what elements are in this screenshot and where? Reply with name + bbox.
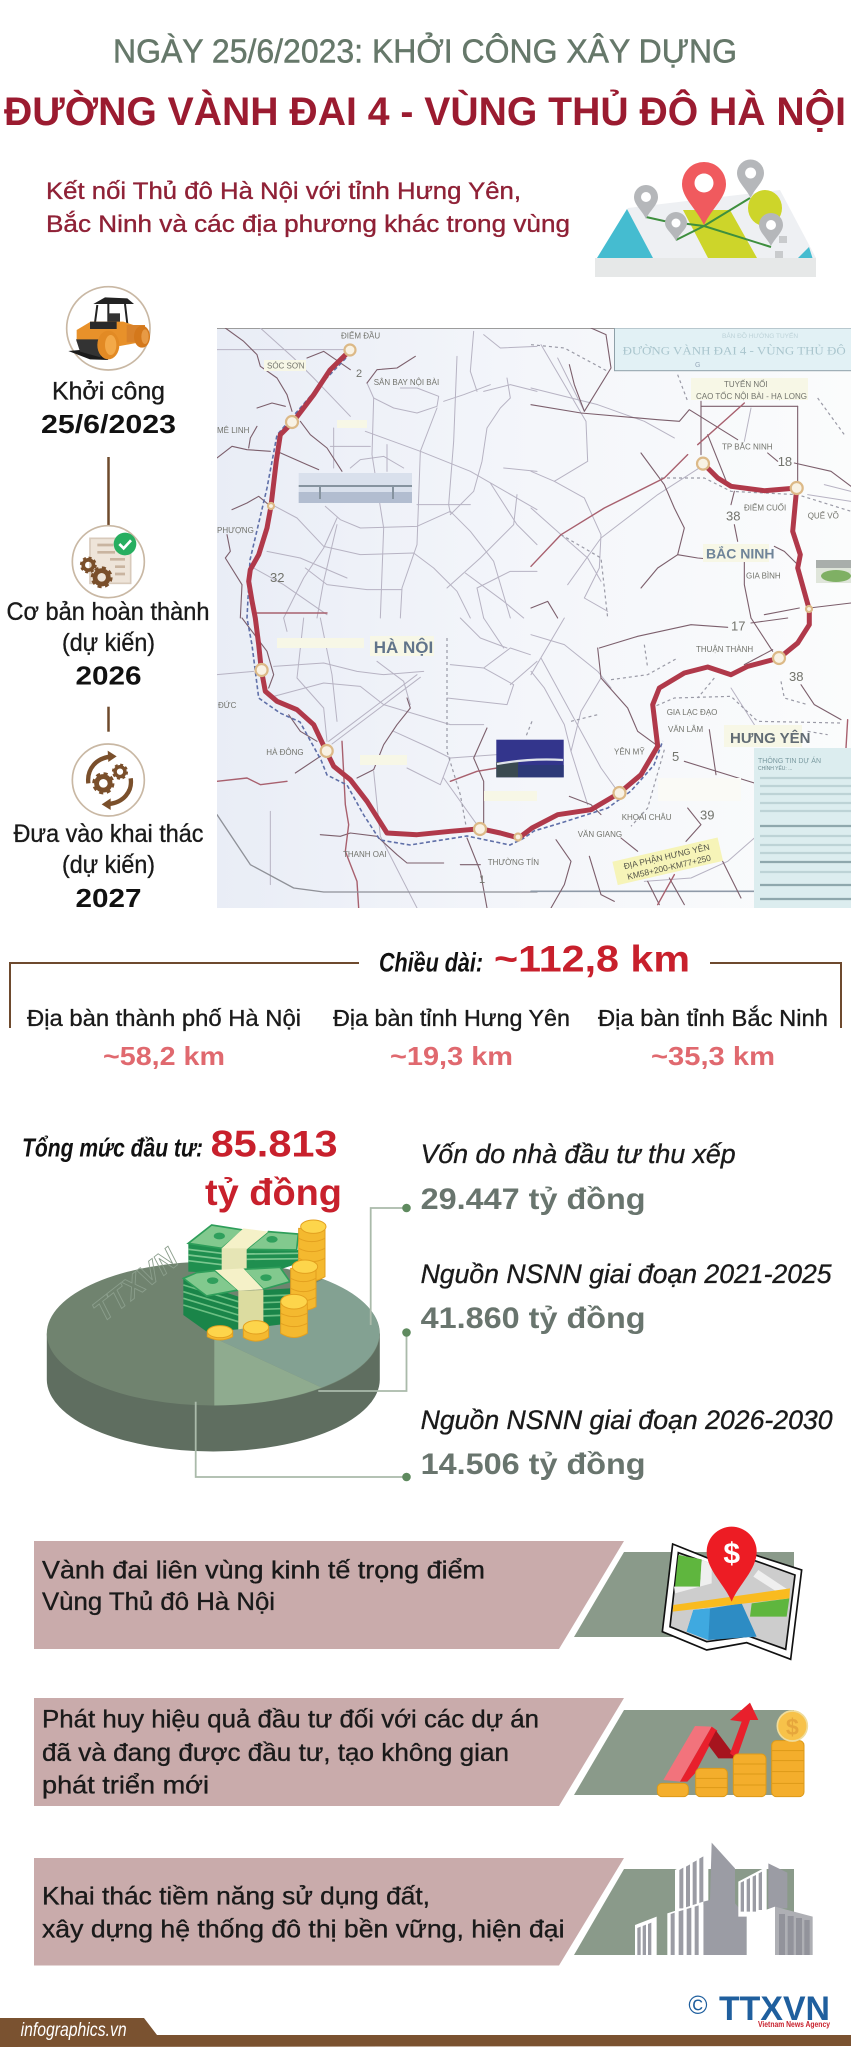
length bracket xyxy=(10,963,841,1028)
map network: south-east xyxy=(531,618,848,908)
map project info panel: CHÍNH YẾU: ... xyxy=(758,765,792,772)
map place labels: 38 xyxy=(726,509,740,524)
map title box: BẢN ĐỒ HƯỚNG TUYẾN xyxy=(722,330,798,340)
funding: state budget 2021-2025: 41.860 tỷ đồng xyxy=(421,1302,646,1335)
column: Ha Noi: Địa bàn thành phố Hà Nội xyxy=(27,1005,301,1031)
map place labels: 18 xyxy=(778,454,792,469)
map place labels: 38 xyxy=(789,669,803,684)
map place labels: 39 xyxy=(700,808,714,823)
map label: Hung Yen section: KM58+200-KM77+250 xyxy=(626,853,712,882)
icon: money and coins xyxy=(183,1220,326,1341)
icon: buildings xyxy=(635,1843,813,1955)
panel: regional economic belt: Vành đai liên vùng kinh tế trọng điểm xyxy=(42,1556,485,1584)
map place labels: VĂN LÂM xyxy=(668,725,703,734)
panel: investment effectiveness: phát triển mới xyxy=(42,1772,209,1800)
map place labels: MÊ LINH xyxy=(217,426,250,435)
funding: state budget 2026-2030: 14.506 tỷ đồng xyxy=(421,1448,646,1481)
map place labels: PHƯỢNG xyxy=(217,526,254,535)
map network: north-west xyxy=(217,328,537,618)
map place labels: BẮC NINH xyxy=(706,545,774,562)
heading: total investment xyxy=(22,1124,342,1213)
column: Bac Ninh: Địa bàn tỉnh Bắc Ninh xyxy=(598,1005,828,1031)
footer bar: infographics.vn xyxy=(21,2020,127,2041)
ring road dashed alignment xyxy=(247,358,663,845)
panel: land use potential xyxy=(34,1843,813,1966)
panel: land use potential: xây dựng hệ thống đô thị bền vững, hiện đại xyxy=(42,1915,564,1943)
map place labels xyxy=(217,331,839,886)
map project info panel: THÔNG TIN DỰ ÁN xyxy=(758,756,821,765)
connector: budget 2026-2030 xyxy=(196,1402,411,1481)
map place labels: HÀ NỘI xyxy=(374,638,433,657)
map place labels: THUẬN THÀNH xyxy=(696,645,753,654)
panel: land use potential: Khai thác tiềm năng sử dụng đất, xyxy=(42,1882,430,1910)
map network: south-west xyxy=(217,618,537,908)
map place labels: SÂN BAY NỘI BÀI xyxy=(374,378,439,387)
column: Ha Noi xyxy=(27,1005,301,1071)
map label: Hung Yen section: ĐỊA PHẬN HƯNG YÊN xyxy=(623,842,711,871)
section: length xyxy=(10,939,841,1071)
column: Hung Yen xyxy=(333,1005,570,1071)
funding: investor capital xyxy=(421,1139,736,1216)
chart: 3D pie of funding: TTXVN xyxy=(87,1241,186,1329)
title: project name: ĐƯỜNG VÀNH ĐAI 4 - VÙNG THỦ ĐÔ HÀ NỘI xyxy=(4,88,846,134)
text: completion expected: (dự kiến) xyxy=(62,629,155,657)
map place labels: GIA LẠC ĐẠO xyxy=(667,708,717,717)
column: Bac Ninh: ~35,3 km xyxy=(651,1041,775,1071)
icon: rising arrow and coins xyxy=(657,1703,807,1797)
text: start label: Khởi công xyxy=(52,378,165,406)
connector: investor capital xyxy=(371,1204,411,1325)
column: Ha Noi: ~58,2 km xyxy=(103,1041,225,1071)
icon: road roller xyxy=(67,287,150,370)
logo: TTXVN: TTXVN xyxy=(719,1990,830,2028)
banknote stack upper xyxy=(188,1225,298,1275)
logo: TTXVN: © xyxy=(688,1990,708,2020)
text: completion label: Cơ bản hoàn thành xyxy=(6,598,210,626)
map place labels: THANH OAI xyxy=(343,850,387,859)
map place labels: ĐIỂM ĐẦU xyxy=(341,331,380,341)
panel: investment effectiveness: đã và đang được đầu tư, tạo không gian xyxy=(42,1739,509,1767)
icon: map with money pin xyxy=(662,1527,802,1659)
icon: documents and gears xyxy=(72,526,144,598)
connector: completion to operation xyxy=(107,707,110,732)
slice: state budget 2021-2025 xyxy=(214,1338,322,1406)
subtitle: Bắc Ninh và các địa phương khác trong vùng xyxy=(46,211,570,238)
heading: total investment: Tổng mức đầu tư: xyxy=(22,1132,203,1162)
map place labels: HÀ ĐÔNG xyxy=(266,748,304,757)
map label: Hung Yen section xyxy=(612,837,723,885)
banknote stack lower xyxy=(183,1267,290,1332)
map place labels: THƯỜNG TÍN xyxy=(488,858,539,867)
icon: location map xyxy=(595,160,816,277)
funding: investor capital: Vốn do nhà đầu tư thu xếp xyxy=(421,1139,736,1169)
map network: north-east xyxy=(531,328,851,618)
ring road line xyxy=(249,351,809,838)
map title box xyxy=(614,328,851,371)
column: Hung Yen: Địa bàn tỉnh Hưng Yên xyxy=(333,1005,570,1031)
funding: investor capital: 29.447 tỷ đồng xyxy=(421,1183,646,1216)
slice: investor capital xyxy=(214,1279,380,1388)
funding: state budget 2026-2030: Nguồn NSNN giai đoạn 2026-2030 xyxy=(421,1405,833,1435)
map: ring road route xyxy=(217,327,851,908)
title: date line: NGÀY 25/6/2023: KHỞI CÔNG XÂY DỰNG xyxy=(113,33,737,70)
connector: budget 2021-2025 xyxy=(318,1328,411,1391)
panel: investment effectiveness: Phát huy hiệu quả đầu tư đối với các dự án xyxy=(42,1706,539,1734)
map place labels: SÓC SƠN xyxy=(267,362,305,371)
column: Bac Ninh xyxy=(598,1005,828,1071)
subtitle: Kết nối Thủ đô Hà Nội với tỉnh Hưng Yên, xyxy=(46,178,521,205)
map place labels: QUẾ VÕ xyxy=(808,511,839,521)
photo: bridge at night xyxy=(496,740,564,777)
map place labels: ĐIỂM CUỐI xyxy=(744,503,786,513)
footer bar xyxy=(0,2018,851,2047)
map place labels: 2 xyxy=(356,368,362,380)
length total: ~112,8 km xyxy=(494,939,690,980)
chart: 3D pie of funding xyxy=(47,1241,380,1451)
panel: regional economic belt: Vùng Thủ đô Hà Nội xyxy=(42,1588,275,1616)
funding: state budget 2021-2025: Nguồn NSNN giai đoạn 2021-2025 xyxy=(421,1259,833,1289)
length label: Chiều dài: xyxy=(379,948,483,978)
map place labels: HƯNG YÊN xyxy=(730,729,811,747)
panel: investment effectiveness xyxy=(34,1698,807,1806)
column: Hung Yen: ~19,3 km xyxy=(390,1041,513,1071)
funding: state budget 2021-2025 xyxy=(421,1259,833,1335)
map place labels: 1 xyxy=(479,874,485,886)
map place labels: ĐỨC xyxy=(218,701,237,710)
subtitle xyxy=(46,178,570,238)
timeline xyxy=(6,287,210,913)
text: start date: 25/6/2023 xyxy=(41,409,176,439)
icon: rising arrow and coins: $ xyxy=(786,1714,799,1740)
photo: highway xyxy=(816,560,851,583)
map place labels: YÊN MỸ xyxy=(614,748,645,757)
map place labels: GIA BÌNH xyxy=(746,572,781,581)
connector: start to completion xyxy=(107,457,110,525)
photo: interchange xyxy=(299,473,412,503)
map place labels: KHOÁI CHÂU xyxy=(622,813,672,822)
map place labels: 32 xyxy=(270,570,284,585)
map place labels: CAO TỐC NỘI BÀI - HẠ LONG xyxy=(696,391,807,401)
text: operation label: Đưa vào khai thác xyxy=(14,820,204,848)
text: completion year: 2026 xyxy=(76,661,142,691)
coin stacks xyxy=(207,1220,326,1341)
map title box: G xyxy=(695,362,700,369)
map place labels: VĂN GIANG xyxy=(578,830,622,839)
route interchange nodes xyxy=(256,344,812,840)
funding: state budget 2026-2030 xyxy=(421,1405,833,1481)
map place labels: 17 xyxy=(731,619,745,634)
text: operation expected: (dự kiến) xyxy=(62,851,155,879)
heading: total investment: tỷ đồng xyxy=(205,1172,342,1213)
map title box: ĐƯỜNG VÀNH ĐAI 4 - VÙNG THỦ ĐÔ xyxy=(623,344,846,358)
text: operation year: 2027 xyxy=(76,883,142,913)
heading: total investment: 85.813 xyxy=(211,1124,338,1164)
map place labels: 5 xyxy=(672,749,679,764)
panel: regional economic belt xyxy=(34,1527,802,1659)
map project info panel xyxy=(754,748,851,908)
icon: map with money pin: $ xyxy=(723,1537,740,1570)
map place labels: TUYẾN NỐI xyxy=(724,379,768,389)
logo: TTXVN: Vietnam News Agency xyxy=(758,2020,830,2029)
map place labels: TP BẮC NINH xyxy=(722,443,773,452)
map pale label boxes xyxy=(264,360,808,801)
icon: rotating gears xyxy=(72,744,144,816)
